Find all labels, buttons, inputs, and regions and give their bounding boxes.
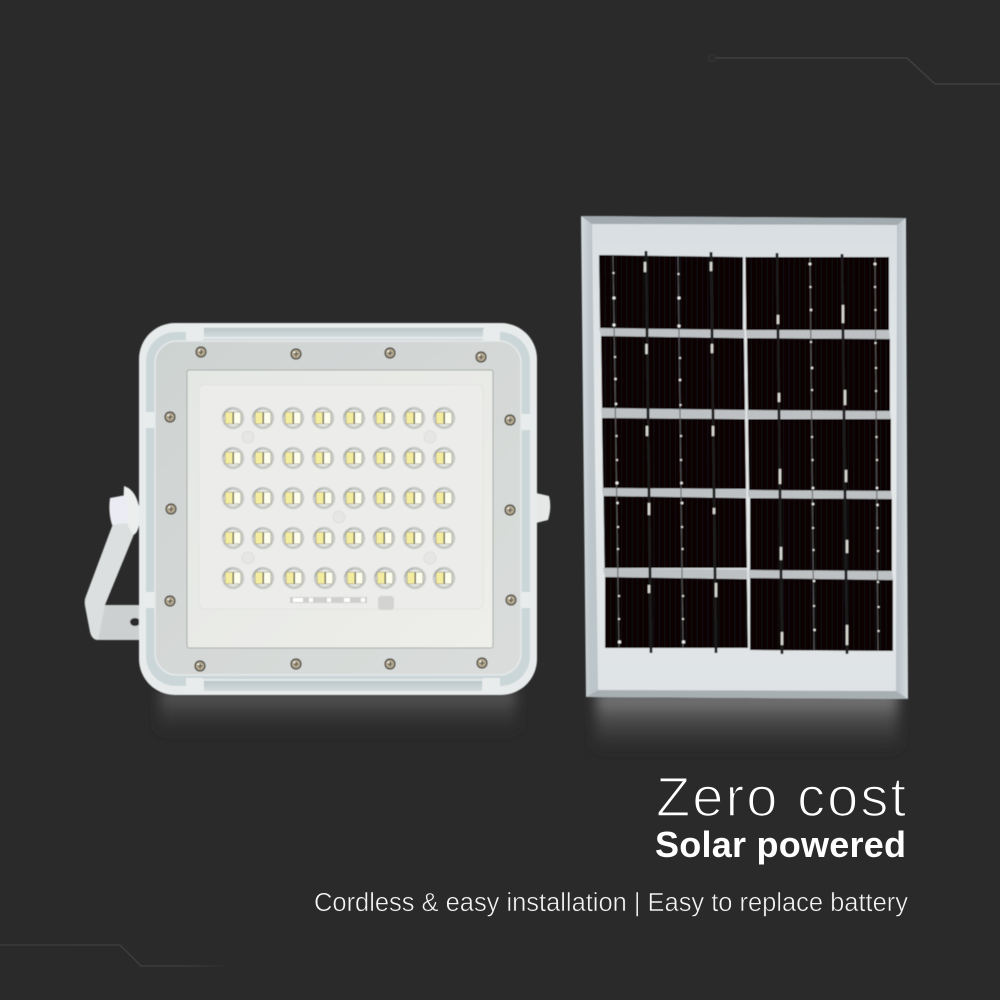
white backsheet	[592, 224, 897, 691]
subheading: Solar powered: Solar powered	[655, 824, 906, 865]
side clips	[146, 327, 534, 692]
reflection under floodlight	[160, 690, 516, 730]
LED grid	[222, 407, 455, 589]
circuit line: top right	[708, 54, 1000, 84]
mounting bracket	[85, 486, 140, 640]
inner tray	[155, 341, 521, 675]
headline: Zero cost: Zero cost	[656, 765, 906, 828]
circuit line: bottom left	[0, 945, 228, 966]
solar cells	[599, 255, 893, 651]
thin ribbon lines	[613, 256, 878, 651]
aluminium frame	[581, 216, 908, 699]
centre interconnect	[744, 257, 749, 651]
LED plate	[187, 370, 493, 648]
label strip and sensor	[290, 596, 394, 610]
feature line: Cordless & easy installation | Easy to replace battery	[314, 889, 908, 917]
channel ring	[146, 332, 530, 686]
housing	[139, 323, 537, 695]
screws	[164, 346, 517, 672]
frame bottom edge shade	[586, 690, 908, 699]
busbar highlights	[645, 262, 847, 645]
top channel strip	[203, 327, 485, 338]
floodlight	[85, 323, 550, 695]
raised plate	[199, 385, 483, 609]
frame top edge shade	[581, 216, 906, 225]
grey gaps between cell rows	[599, 328, 893, 580]
reflection under solar panel	[596, 692, 898, 748]
bottom channel strip	[203, 680, 483, 692]
dark busbars	[646, 251, 847, 654]
text block	[314, 765, 908, 917]
ghost mounting circles	[242, 431, 436, 564]
solar panel	[581, 216, 908, 699]
right pivot knob	[536, 493, 550, 523]
ribbon solder dots	[612, 263, 880, 644]
